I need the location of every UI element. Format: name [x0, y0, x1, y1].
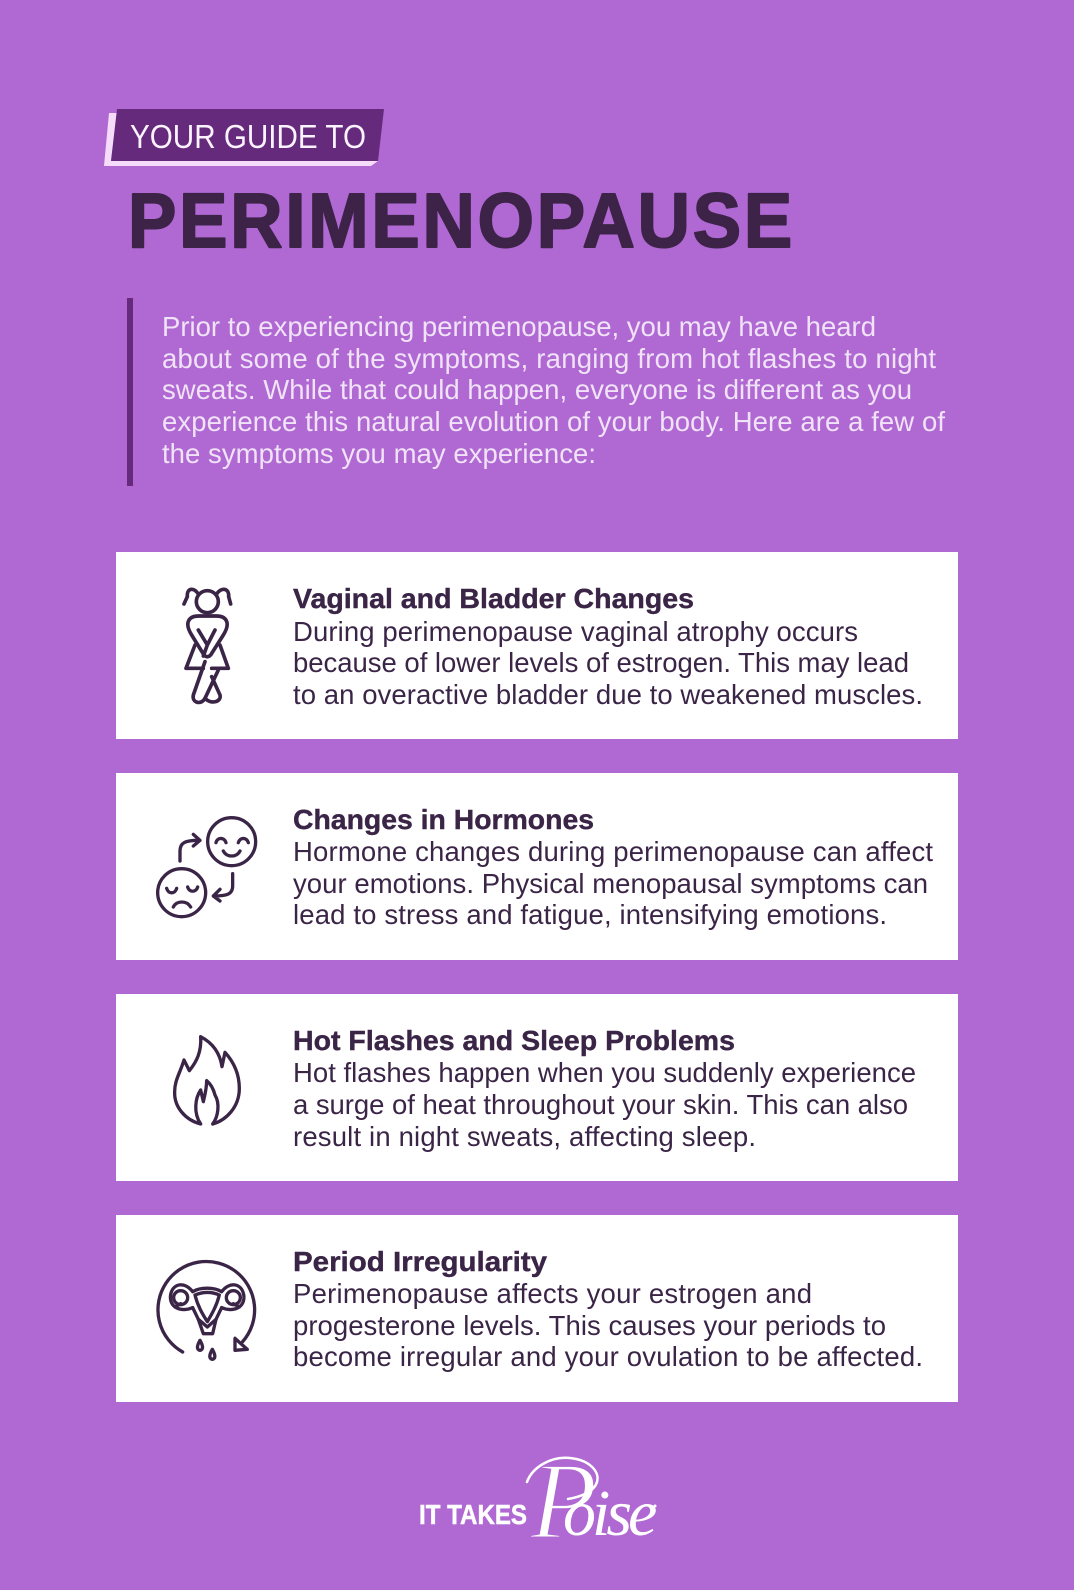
intro text block: sweats. While that could happen, everyone is different as you — [162, 374, 912, 405]
card text: Hormone changes during perimenopause can affect — [293, 836, 933, 867]
card heading: Changes in Hormones — [293, 804, 594, 835]
card heading: Hot Flashes and Sleep Problems — [293, 1025, 735, 1056]
intro text block — [127, 298, 945, 486]
card text: During perimenopause vaginal atrophy occurs — [293, 616, 858, 647]
panel: vaginal and bladder changes — [116, 552, 958, 739]
card text — [293, 836, 933, 930]
intro text block: experience this natural evolution of your body. Here are a few of — [162, 406, 945, 437]
card heading: Vaginal and Bladder Changes — [293, 583, 694, 614]
icon: girl crossing legs — [184, 589, 231, 702]
intro text block: the symptoms you may experience: — [162, 438, 596, 469]
card text: to an overactive bladder due to weakened muscles. — [293, 679, 923, 710]
card text — [293, 1278, 923, 1372]
icon: flame — [175, 1037, 239, 1124]
panel: hot flashes and sleep problems — [116, 994, 958, 1181]
card text: Hot flashes happen when you suddenly experience — [293, 1057, 916, 1088]
card text: a surge of heat throughout your skin. This can also — [293, 1089, 908, 1120]
title: PERIMENOPAUSE — [128, 178, 795, 264]
icon: mood swing faces — [158, 818, 256, 917]
icon: uterus cycle — [158, 1262, 255, 1359]
card text — [293, 616, 923, 710]
card heading: Period Irregularity — [293, 1246, 547, 1277]
badge: your guide to: YOUR GUIDE TO — [130, 118, 366, 155]
logo: it takes poise — [419, 1440, 656, 1562]
intro text block: about some of the symptoms, ranging from hot flashes to night — [162, 343, 936, 374]
card text: result in night sweats, affecting sleep. — [293, 1121, 756, 1152]
card text: because of lower levels of estrogen. This may lead — [293, 647, 909, 678]
panel: period irregularity — [116, 1215, 958, 1402]
panel: changes in hormones — [116, 773, 958, 960]
card text — [293, 1057, 916, 1152]
card text: become irregular and your ovulation to be affected. — [293, 1341, 923, 1372]
logo: it takes poise: IT TAKES — [419, 1499, 527, 1530]
logo: it takes poise: P — [529, 1440, 597, 1562]
logo: it takes poise: oise — [563, 1477, 656, 1550]
badge: your guide to — [104, 109, 384, 166]
card text: progesterone levels. This causes your periods to — [293, 1310, 886, 1341]
card text: your emotions. Physical menopausal symptoms can — [293, 868, 928, 899]
intro text block: Prior to experiencing perimenopause, you may have heard — [162, 311, 876, 342]
card text: Perimenopause affects your estrogen and — [293, 1278, 812, 1309]
card text: lead to stress and fatigue, intensifying emotions. — [293, 899, 887, 930]
